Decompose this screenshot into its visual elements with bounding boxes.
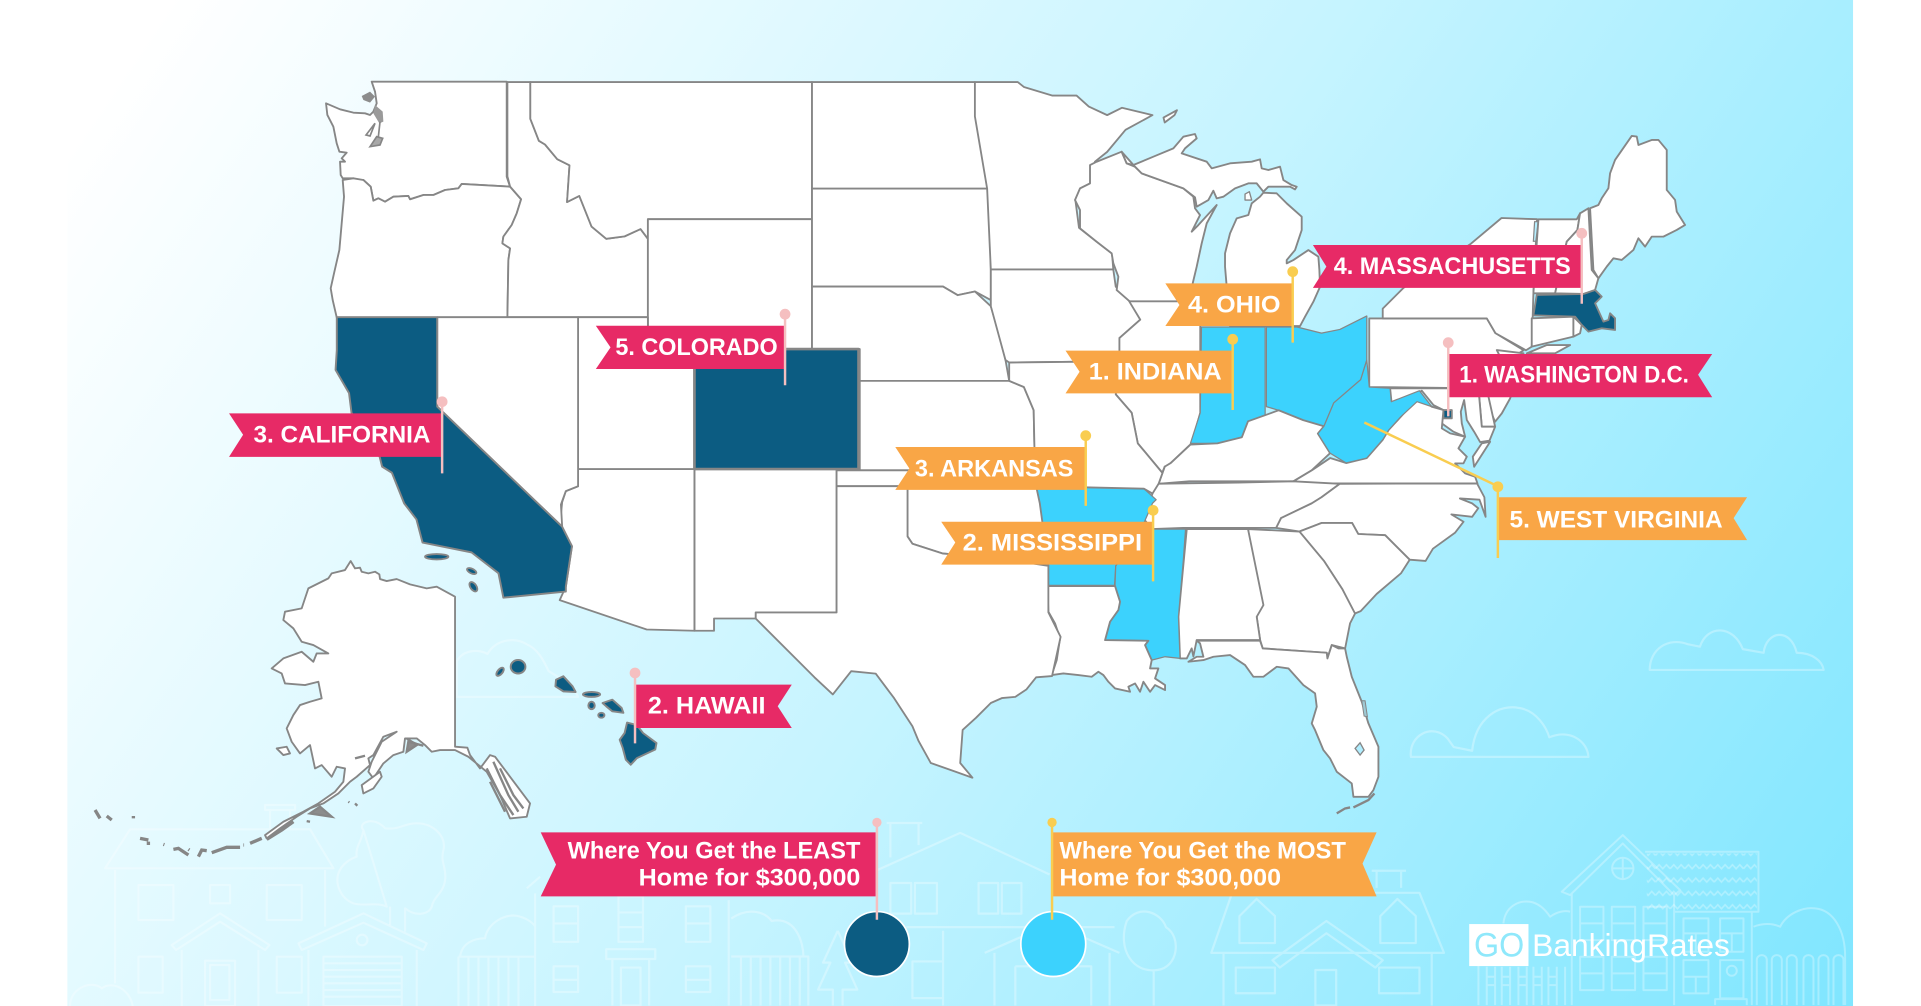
state: North Dakota [812,82,990,189]
state: Rhode Island [1573,317,1582,337]
callout: 1. Indiana [1066,334,1238,410]
Hawaii: Kahoolawe [598,713,604,718]
legend ribbon: most [1052,832,1377,896]
state: California [336,317,572,598]
legend text: most: Where You Get the MOST [1059,837,1346,864]
Aleutian islands [95,810,293,857]
Hawaii: Kauai [511,660,525,673]
legend swatch: light blue [1021,912,1086,976]
cloud: far right [1650,630,1824,670]
legend ribbon: least [541,832,876,896]
state: Colorado [694,349,859,469]
state: Missouri [1009,361,1165,494]
state: Michigan lower peninsula [1225,193,1320,326]
small islands [307,802,357,822]
state: Virginia [1293,397,1477,483]
legend: most home [1021,818,1377,976]
state: Alaska [265,561,530,838]
callout: 2. Mississippi: 2. MISSISSIPPI [963,530,1142,557]
house: cape with dormers [1211,871,1444,1006]
state: Utah [578,317,694,469]
callout: 2. Hawaii [630,668,792,743]
Puget Sound: Whidbey area [373,105,383,123]
callout: 2. Mississippi [941,505,1158,581]
Lake Champlain [1533,222,1538,241]
state: Ohio [1266,316,1367,426]
state: Hawaii [495,660,656,765]
decorative line art: clouds and houses [70,630,1845,1006]
map of the United States [326,82,1685,813]
legend swatch: dark blue [844,912,909,976]
state: North Carolina [1276,483,1486,561]
callout: 5. West Virginia: 5. WEST VIRGINIA [1509,506,1723,533]
state: South Dakota [812,189,991,300]
state: Indiana [1190,327,1265,443]
states: Mid-Atlantic [1293,345,1570,483]
California Channel Islands [425,554,479,593]
state: Arkansas [1036,486,1156,585]
logo: GOBankingRates: BankingRates [1532,927,1730,963]
Hawaii: Maui [603,700,623,713]
callout: 4. Ohio: 4. OHIO [1188,292,1280,319]
state: Vermont [1533,213,1580,293]
state: Idaho [502,82,648,317]
state: West Virginia [1318,360,1432,463]
callout: 1. Indiana: 1. INDIANA [1089,358,1222,385]
house, tree and fence: far left [70,805,540,1006]
Hawaii: Oahu [555,676,576,692]
state: Michigan upper peninsula [1122,134,1297,207]
district: Washington D.C. [1443,410,1452,418]
state: Wyoming [648,219,812,349]
Hawaii: Niihau [495,666,505,677]
state: Iowa [991,269,1140,363]
house: centre [876,823,1119,1006]
state: Kansas [860,381,1035,470]
callout: 2. Hawaii: 2. HAWAII [648,693,765,720]
Hawaii: Big Island [620,723,656,765]
state: Massachusetts [1533,290,1615,332]
callout: 5. West Virginia [1364,423,1747,558]
states: Gulf coast [1047,586,1378,813]
states: Great Lakes [1075,134,1320,326]
Puget Sound: San Juan islands [362,92,375,103]
state: Pennsylvania [1369,318,1524,388]
logo: GOBankingRates [1469,924,1730,966]
callout: 3. Arkansas [895,430,1091,506]
Nunivak Island [277,747,290,755]
state: New Mexico [694,469,836,631]
state: Oklahoma [836,470,1048,566]
state: Kentucky [1159,410,1330,484]
callout: 4. Massachusetts [1313,228,1587,304]
Kodiak Island [362,772,382,793]
tree: centre [1124,912,1176,1006]
callout: 1. Washington D.C. [1443,337,1712,416]
states: New England [1532,136,1685,347]
state: Arizona [560,469,694,631]
state: Delaware [1478,388,1495,427]
state: Nevada [437,317,578,527]
Lake Okeechobee [1355,743,1364,755]
legend text: least: Home for $300,000 [639,864,860,891]
state: Maryland [1390,388,1495,442]
callout: 1. Washington D.C.: 1. WASHINGTON D.C. [1459,362,1689,389]
state: Tennessee [1144,481,1340,529]
state: Texas [756,486,1061,778]
state: Florida [1188,641,1378,797]
legend text: least: Where You Get the LEAST [568,837,860,864]
cloud: behind Hawaii [457,640,578,697]
legend text: most: Home for $300,000 [1059,864,1281,891]
Alaska panhandle inlets [487,762,523,815]
state: Alabama [1178,529,1263,658]
callout: 5. Colorado [596,309,790,385]
callout: 5. Colorado: 5. COLORADO [615,334,778,361]
state: New Hampshire [1555,208,1598,294]
Florida Keys [1337,793,1374,813]
callout: 3. California [229,396,448,473]
state: New Jersey [1482,350,1523,422]
state: Connecticut [1532,317,1573,347]
state: Maine [1590,136,1685,278]
pine tree [818,931,857,1006]
state: Washington [326,82,510,202]
Alaska mainland and peninsula [265,561,530,838]
callout: 3. Arkansas: 3. ARKANSAS [915,455,1073,482]
state: Louisiana [1047,586,1165,692]
callout: 3. California: 3. CALIFORNIA [254,422,430,449]
state: Georgia [1248,529,1355,658]
state: Wisconsin [1075,152,1217,302]
state: Montana [530,82,812,239]
state: Oregon [331,178,521,317]
state: Mississippi [1105,523,1186,660]
Alaska: Kenai and Prince William detail [310,738,423,817]
townhouses [554,897,808,1006]
Indian River lagoon [1362,701,1367,717]
Puget Sound: southern inlets [370,122,383,147]
house: chevron roof with fences [1478,835,1845,1005]
callout: 4. Massachusetts: 4. MASSACHUSETTS [1334,253,1571,280]
Hawaii: Lanai [588,702,595,709]
state: Nebraska [812,287,1009,381]
Beaver Island [1245,192,1252,200]
states: Pacific Northwest [326,82,521,317]
Hawaii: Molokai [583,692,600,697]
Puget Sound: Hood Canal [366,123,375,136]
logo: GOBankingRates: GO [1474,927,1524,965]
cloud: gulf [1411,707,1588,757]
Long Island [1527,345,1570,353]
state: South Carolina [1299,523,1410,614]
state: Illinois [1116,301,1200,473]
state: Minnesota [975,82,1152,269]
Virginia eastern shore [1473,442,1490,467]
Isle Royale [1164,110,1177,122]
state: New York [1383,218,1537,350]
callout: 4. Ohio [1165,266,1298,343]
legend: least home [541,818,909,976]
